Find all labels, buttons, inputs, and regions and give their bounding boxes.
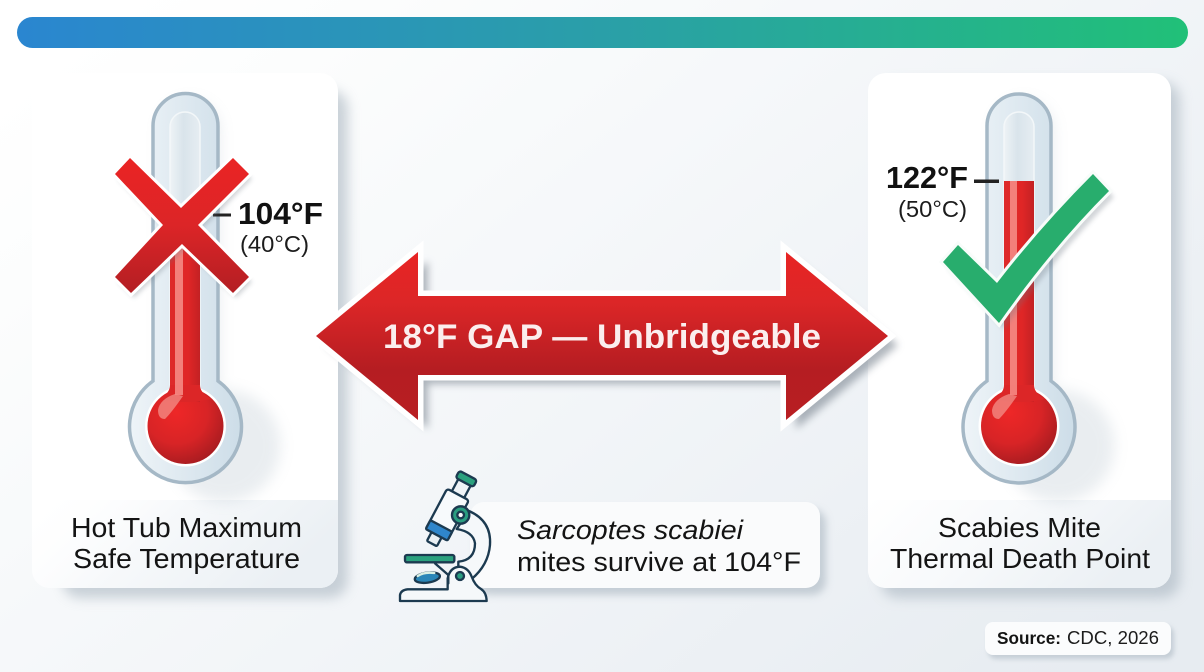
source badge	[985, 622, 1174, 659]
tick: 122°F	[974, 180, 999, 183]
callout text: mites survive at 104°F	[517, 547, 801, 577]
panel: scabies mite	[868, 73, 1180, 598]
callout: mites survive	[470, 502, 826, 595]
arrow label: 18°F GAP — Unbridgeable	[383, 318, 821, 356]
source text	[997, 628, 1159, 648]
caption: scabies mite: Scabies Mite	[938, 512, 1101, 543]
thermometer: right	[963, 94, 1114, 502]
top gradient bar	[17, 17, 1188, 48]
label: 122°F (50°C): (50°C)	[898, 196, 967, 222]
caption: scabies mite	[890, 512, 1150, 574]
caption: scabies mite: Thermal Death Point	[890, 543, 1150, 574]
label: 122°F (50°C)	[886, 160, 968, 222]
label: 104°F (40°C): (40°C)	[240, 231, 309, 257]
caption: hot tub: Hot Tub Maximum	[71, 512, 302, 543]
label: 104°F (40°C)	[238, 196, 323, 257]
thermometer: left	[130, 94, 280, 502]
tick: 104°F	[213, 214, 231, 216]
caption: hot tub: Safe Temperature	[73, 543, 300, 574]
callout text	[517, 515, 801, 577]
icon: microscope	[400, 470, 490, 601]
source text: Source:	[997, 628, 1061, 648]
label: 104°F (40°C): 104°F	[238, 196, 323, 231]
label: 122°F (50°C): 122°F	[886, 160, 968, 195]
red X icon	[115, 158, 252, 298]
double arrow: 18°F gap	[316, 252, 898, 429]
panel: hot tub maximum	[32, 73, 348, 598]
source text: CDC, 2026	[1067, 628, 1159, 648]
caption: hot tub	[71, 512, 302, 574]
callout text: Sarcoptes scabiei	[517, 515, 744, 545]
green check icon	[943, 174, 1114, 329]
